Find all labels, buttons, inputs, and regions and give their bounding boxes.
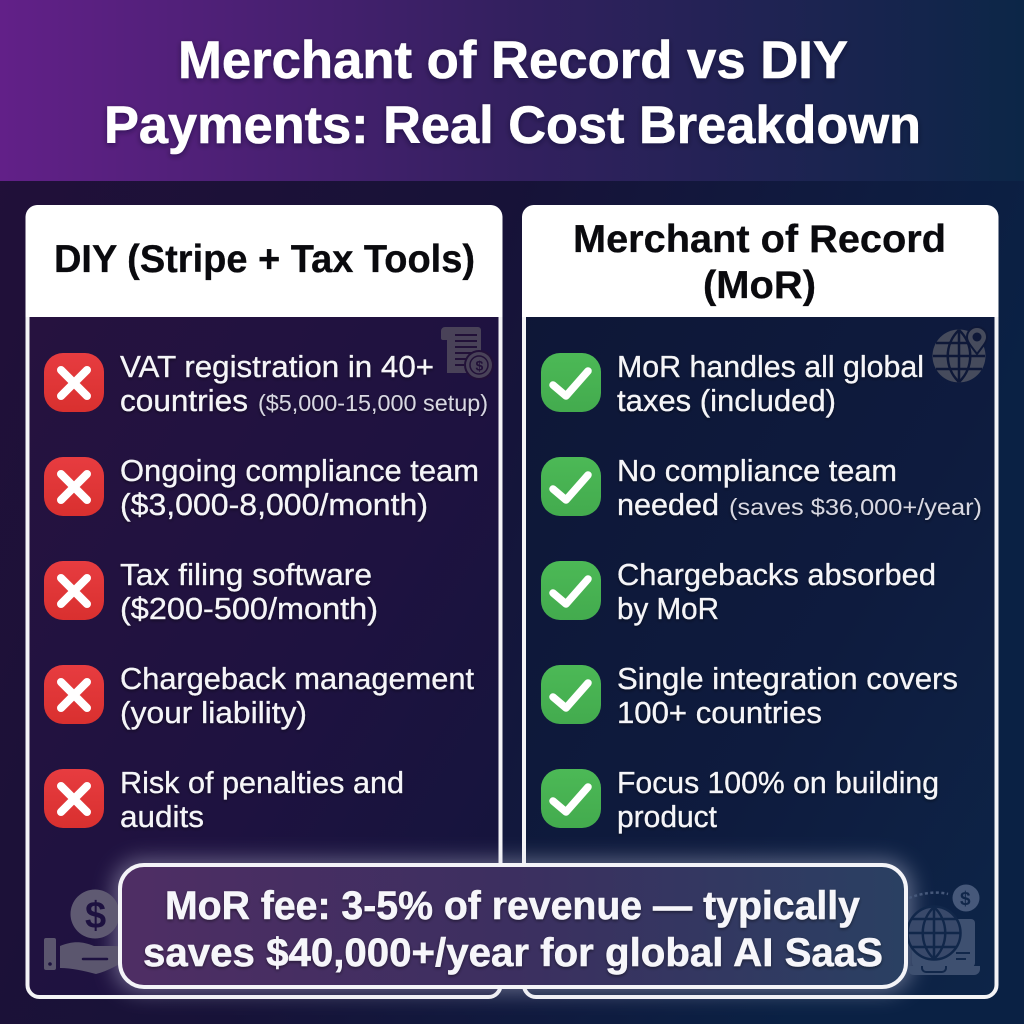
header band xyxy=(0,0,1024,181)
item: single integration xyxy=(541,662,958,730)
icon: red cross xyxy=(44,769,104,828)
icon: red cross xyxy=(44,353,104,412)
item: no compliance team: (saves $36,000+/year) xyxy=(729,494,982,520)
item: VAT registration: countries xyxy=(120,384,248,418)
panel header: DIY xyxy=(26,205,502,317)
item: compliance team xyxy=(44,454,479,522)
item: focus on product: Focus 100% on building xyxy=(617,766,939,800)
panel header: MoR: (MoR) xyxy=(703,264,816,307)
icon: tax document with coin xyxy=(441,327,494,380)
callout glow xyxy=(114,860,912,992)
item: chargebacks absorbed: by MoR xyxy=(617,592,719,626)
item: no compliance team: No compliance team xyxy=(617,454,897,488)
callout: saves $40,000+/year for global AI SaaS xyxy=(143,931,883,975)
icon: green check xyxy=(541,665,601,724)
item: focus on product xyxy=(541,766,939,834)
title: Merchant of Record vs DIY xyxy=(178,31,848,90)
item: compliance team: ($3,000-8,000/month) xyxy=(120,488,428,522)
item: handles global taxes: MoR handles all global xyxy=(617,350,924,384)
icon: red cross xyxy=(44,457,104,516)
icon: green check xyxy=(541,353,601,412)
item: penalties and audits xyxy=(44,766,404,834)
item: compliance team: Ongoing compliance team xyxy=(120,454,479,488)
item: focus on product: product xyxy=(617,800,718,834)
item: tax filing software: ($200-500/month) xyxy=(120,592,378,626)
item: single integration: 100+ countries xyxy=(617,696,822,730)
item: chargeback management xyxy=(44,662,475,730)
item: chargebacks absorbed: Chargebacks absorbed xyxy=(617,558,936,592)
item: VAT registration xyxy=(44,350,488,418)
panel: MoR xyxy=(522,205,998,997)
icon: hand holding coin: $ xyxy=(85,895,106,937)
item: penalties and audits: audits xyxy=(120,800,204,834)
icon: green check xyxy=(541,769,601,828)
panel header: DIY: DIY (Stripe + Tax Tools) xyxy=(54,238,475,281)
item: tax filing software: Tax filing software xyxy=(120,558,372,592)
panel header: MoR: Merchant of Record xyxy=(573,218,946,261)
item: no compliance team: needed xyxy=(617,488,719,522)
item: chargeback management: Chargeback management xyxy=(120,662,475,696)
title xyxy=(104,31,921,155)
icon: green check xyxy=(541,457,601,516)
item: handles global taxes xyxy=(541,350,924,418)
icon: green check xyxy=(541,561,601,620)
icon: red cross xyxy=(44,561,104,620)
icon: tax document with coin: $ xyxy=(476,358,484,374)
panel: DIY xyxy=(26,205,502,997)
icon: laptop with globe and coin xyxy=(908,884,980,975)
icon: red cross xyxy=(44,665,104,724)
item: tax filing software xyxy=(44,558,378,626)
item: chargebacks absorbed xyxy=(541,558,936,626)
item: chargeback management: (your liability) xyxy=(120,696,307,730)
panel header: MoR xyxy=(522,205,998,317)
callout: MoR fee: 3-5% of revenue — typically xyxy=(165,884,861,928)
icon: globe with pin xyxy=(932,327,987,382)
title: Payments: Real Cost Breakdown xyxy=(104,96,921,155)
icon: hand holding coin xyxy=(44,890,128,974)
icon: laptop with globe and coin: $ xyxy=(960,889,971,910)
item: no compliance team xyxy=(541,454,982,522)
item: handles global taxes: taxes (included) xyxy=(617,384,836,418)
item: single integration: Single integration covers xyxy=(617,662,958,696)
item: VAT registration: VAT registration in 40+ xyxy=(120,350,434,384)
callout xyxy=(120,865,906,987)
item: VAT registration: ($5,000-15,000 setup) xyxy=(258,390,488,416)
item: penalties and audits: Risk of penalties and xyxy=(120,766,404,800)
